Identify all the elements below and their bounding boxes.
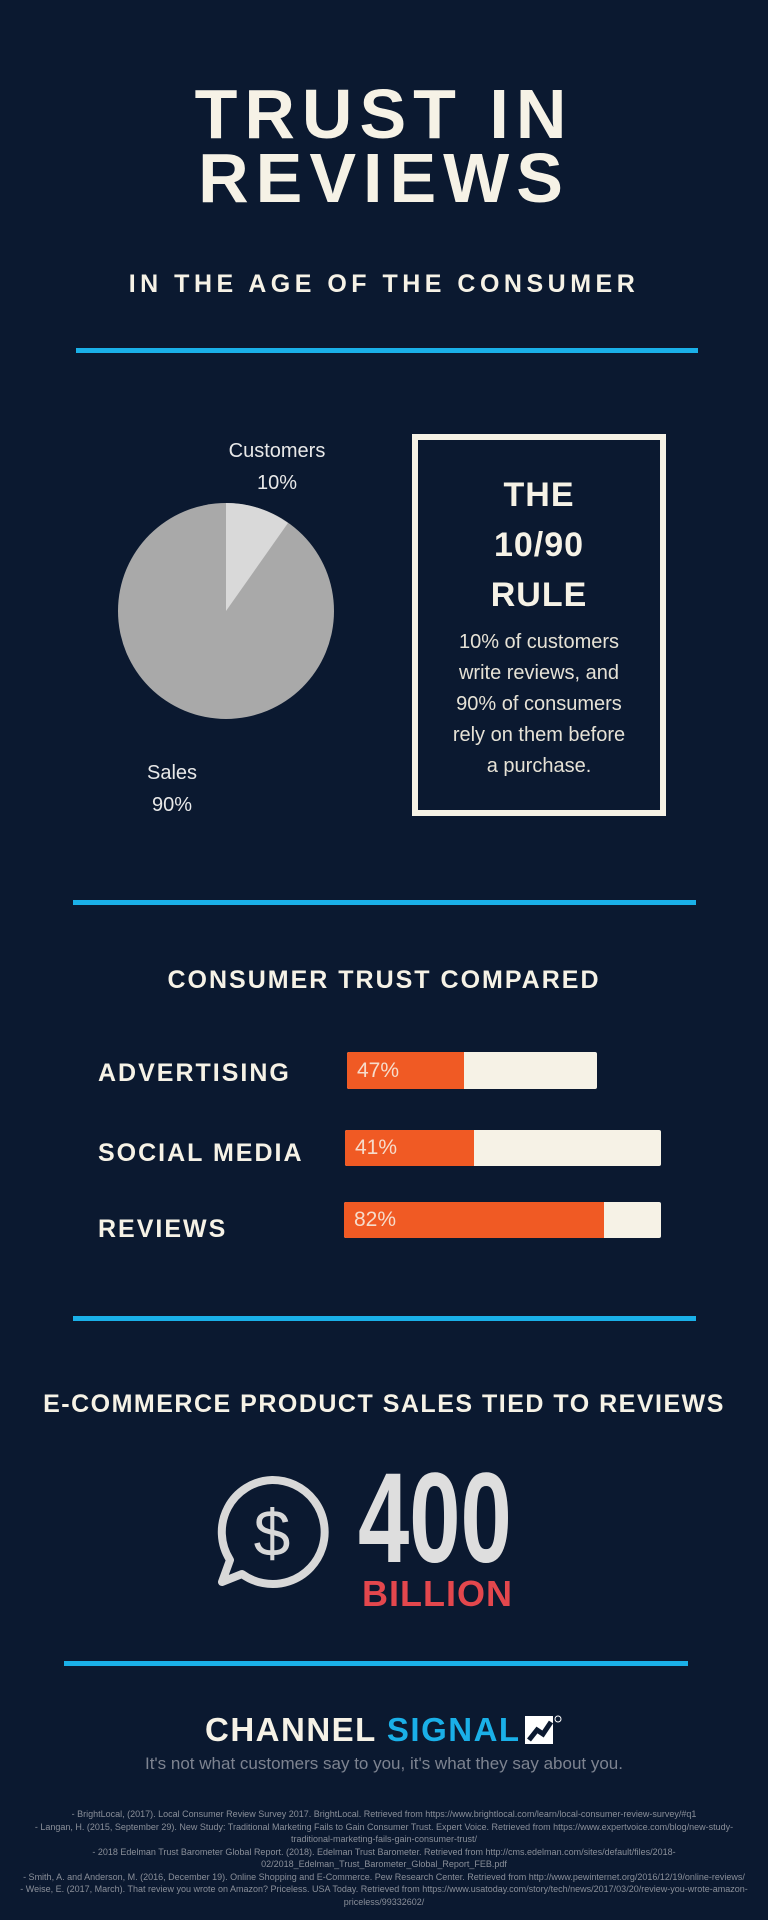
title: TRUST IN (195, 75, 573, 153)
pie chart (118, 503, 334, 719)
bar: social media (345, 1130, 661, 1166)
icon: dollar speech bubble (218, 1476, 329, 1588)
references: - BrightLocal, (2017). Local Consumer Review Survey 2017. BrightLocal. Retrieved from https://www.brightlocal.com/learn/local-consumer-review-survey/#q1 (72, 1809, 696, 1819)
heading: consumer trust compared: CONSUMER TRUST COMPARED (167, 966, 601, 994)
stat: 400: 400 (358, 1447, 512, 1590)
logo: channel signal: CHANNEL SIGNAL (205, 1711, 521, 1748)
label: reviews: REVIEWS (98, 1215, 227, 1243)
references (20, 1809, 748, 1907)
references: - Smith, A. and Anderson, M. (2016, December 19). Online Shopping and E-Commerce. Pew Research Center. Retrieved from http://www.pewinternet.org/2016/12/19/online-reviews/ (23, 1872, 745, 1882)
icon: dollar speech bubble: $ (254, 1496, 290, 1570)
heading: RULE (491, 576, 587, 614)
tagline: It's not what customers say to you, it's what they say about you. (145, 1754, 623, 1773)
pie label: sales: Sales (147, 762, 197, 784)
icon: logo mark (525, 1716, 562, 1744)
text block: 90% of consumers (456, 693, 622, 715)
label: advertising: ADVERTISING (98, 1059, 291, 1087)
bar: advertising: 47% (357, 1058, 399, 1082)
pie label: customers (229, 440, 325, 494)
title (195, 75, 573, 217)
pie label: sales: 90% (152, 794, 192, 816)
title: REVIEWS (198, 139, 570, 217)
subtitle: IN THE AGE OF THE CONSUMER (129, 270, 639, 298)
text block: rely on them before (453, 724, 625, 746)
bar: reviews (344, 1202, 661, 1238)
references: - 2018 Edelman Trust Barometer Global Report. (2018). Edelman Trust Barometer. Retrieved from http://cms.edelman.com/sites/default/files/2018- (92, 1846, 676, 1856)
stat: billion: BILLION (362, 1573, 513, 1614)
references: - Langan, H. (2015, September 29). New Study: Traditional Marketing Fails to Gain Consumer Trust. Expert Voice. Retrieved from https://www.expertvoice.com/blog/new-study- (35, 1822, 733, 1832)
heading: THE (504, 476, 574, 514)
text block: a purchase. (487, 755, 591, 777)
pie label: customers: Customers (229, 440, 325, 462)
bar: advertising (347, 1052, 597, 1089)
pie label: sales (147, 762, 197, 816)
label: social media: SOCIAL MEDIA (98, 1139, 304, 1167)
references: 02/2018_Edelman_Trust_Barometer_Global_Report_FEB.pdf (261, 1859, 507, 1869)
text block: write reviews, and (459, 662, 619, 684)
references: priceless/99332602/ (344, 1896, 424, 1906)
bar: social media: 41% (355, 1136, 397, 1159)
pie label: customers: 10% (257, 472, 297, 494)
references: - Weise, E. (2017, March). That review you wrote on Amazon? Priceless. USA Today. Retrieved from https://www.usatoday.com/story/tech/news/2017/03/20/review-you-wrote-amazon- (20, 1884, 748, 1894)
panel: 10/90 rule (412, 434, 666, 816)
heading: e-commerce: E-COMMERCE PRODUCT SALES TIED TO REVIEWS (43, 1390, 725, 1418)
references: traditional-marketing-fails-gain-consumer-trust/ (291, 1834, 477, 1844)
heading (491, 476, 587, 614)
text block (453, 631, 625, 777)
text block: 10% of customers (459, 631, 619, 653)
heading: 10/90 (494, 526, 584, 564)
bar: reviews: 82% (354, 1208, 396, 1231)
